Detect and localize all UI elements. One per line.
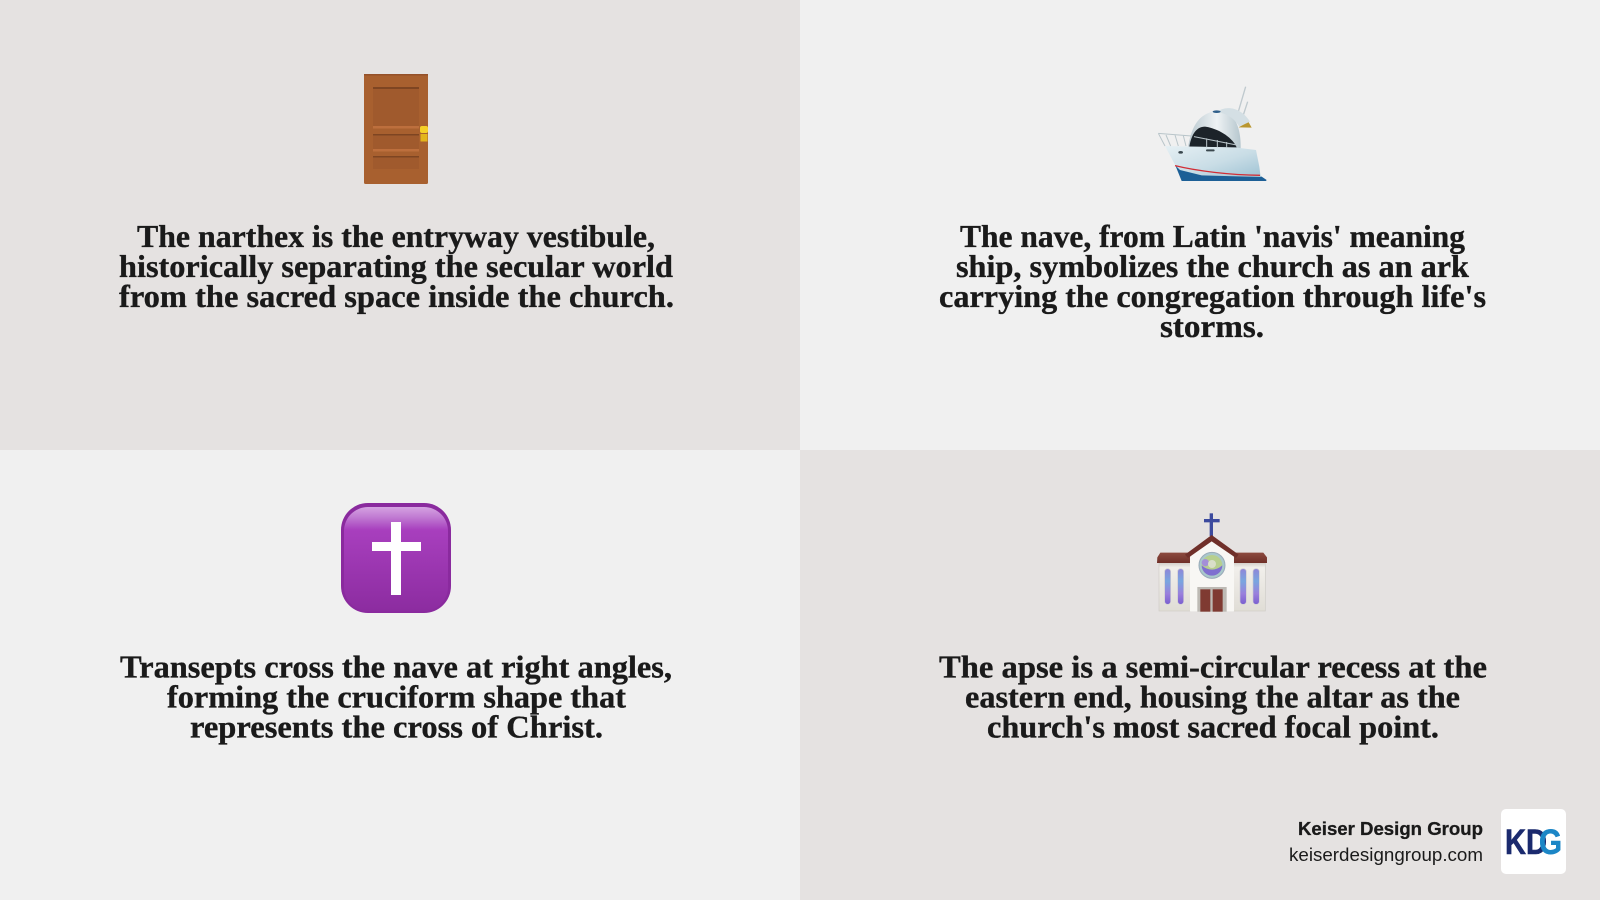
logo: KDG: KD	[1505, 823, 1547, 862]
text: transepts description: represents the cross of Christ.	[190, 708, 603, 744]
logo: KDG	[1501, 809, 1566, 874]
icon: latin cross on purple square	[341, 503, 451, 613]
branding: Keiser Design Group	[1289, 809, 1566, 874]
icon: church	[1157, 513, 1267, 612]
text: nave description	[939, 218, 1486, 344]
text: company name: Keiser Design Group	[1298, 818, 1483, 839]
panel: narthex	[0, 0, 800, 450]
text: nave description: storms.	[1160, 308, 1264, 344]
panel: transepts	[0, 450, 800, 900]
text: apse description: eastern end, housing the altar as the	[965, 678, 1460, 714]
icon: door	[364, 74, 428, 184]
text: apse description: The apse is a semi-circular recess at the	[939, 648, 1487, 684]
icon: boat	[1158, 87, 1267, 181]
text: transepts description	[120, 648, 672, 744]
text: nave description: The nave, from Latin 'navis' meaning	[960, 218, 1465, 254]
panel: nave	[800, 0, 1600, 450]
logo: KDG: G	[1539, 823, 1562, 862]
text: nave description: ship, symbolizes the church as an ark	[956, 248, 1469, 284]
text: narthex description: The narthex is the entryway vestibule,	[137, 218, 655, 254]
text: company website: keiserdesigngroup.com	[1289, 844, 1483, 865]
text: apse description	[939, 648, 1487, 744]
text: narthex description	[119, 218, 674, 314]
text: transepts description: forming the cruciform shape that	[167, 678, 626, 714]
text: nave description: carrying the congregation through life's	[939, 278, 1486, 314]
text: narthex description: historically separating the secular world	[119, 248, 673, 284]
panel: apse	[800, 450, 1600, 900]
text: narthex description: from the sacred space inside the church.	[119, 278, 674, 314]
text: apse description: church's most sacred focal point.	[987, 708, 1439, 744]
text: transepts description: Transepts cross the nave at right angles,	[120, 648, 672, 684]
